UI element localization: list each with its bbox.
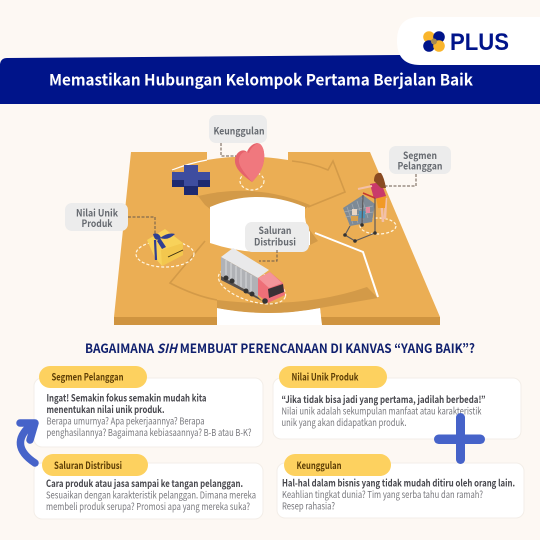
panel: Keunggulan: Resep rahasia? [282, 498, 335, 512]
canvas board [114, 152, 440, 325]
label: Nilai Unik Produk: Nilai Unik [76, 206, 118, 220]
label: Keunggulan: Keunggulan [214, 124, 264, 138]
icon: heart [235, 143, 264, 190]
arrow outlines [172, 161, 345, 207]
panel: Segmen Pelanggan: Ingat! Semakin fokus semakin mudah kita [46, 390, 206, 404]
panel: Segmen Pelanggan [34, 366, 263, 447]
panel: Nilai Unik Produk: “Jika tidak bisa jadi yang pertama, jadilah berbeda!” [282, 392, 486, 406]
panel: Segmen Pelanggan: Segmen Pelanggan [52, 370, 124, 384]
panel: Segmen Pelanggan: penghasilannya? Bagaimana kebiasaannya? B-B atau B-K? [46, 425, 252, 439]
icon: blue plus [434, 413, 485, 464]
panel: Saluran Distribusi: Sesuaikan dengan karakteristik pelanggan. Dimana mereka [46, 488, 256, 502]
panel: Nilai Unik Produk: Nilai unik adalah sekumpulan manfaat atau karakteristik [282, 404, 482, 418]
label: Nilai Unik Produk [65, 203, 155, 235]
panel: Keunggulan: Keunggulan [296, 458, 342, 472]
label: Saluran Distribusi: Saluran [258, 223, 292, 237]
centre cut-out [210, 197, 310, 252]
arc shadows [198, 191, 310, 209]
panel: Saluran Distribusi [34, 454, 263, 519]
panel: Nilai Unik Produk [273, 366, 521, 439]
label: Keunggulan [209, 115, 267, 156]
section heading: BAGAIMANA SIH MEMBUAT PERENCANAAN DI KANVAS “YANG BAIK”? [85, 338, 475, 357]
label: Saluran Distribusi: Distribusi [254, 234, 296, 248]
label: Segmen Pelanggan: Segmen [403, 148, 437, 162]
label: Segmen Pelanggan [384, 146, 451, 186]
panel: Nilai Unik Produk: Nilai Unik Produk [292, 370, 359, 384]
panel: Saluran Distribusi: membeli produk serupa? Promosi apa yang mereka suka? [46, 499, 250, 513]
label: Nilai Unik Produk: Produk [82, 216, 113, 230]
icon: gift box [136, 229, 194, 267]
icon: blue cross [172, 165, 210, 195]
white seam [315, 233, 378, 297]
panel: Segmen Pelanggan: menentukan nilai unik produk. [46, 402, 164, 416]
panel: Nilai Unik Produk: unik yang akan didapatkan produk. [282, 415, 406, 429]
logo: PLUS [397, 17, 540, 65]
label: Segmen Pelanggan: Pelanggan [398, 158, 442, 172]
arrow: curved blue [20, 423, 35, 463]
icon: truck [214, 248, 290, 311]
label: Saluran Distribusi [245, 222, 309, 261]
panel: Keunggulan: Keahlian tingkat dunia? Tim yang serba tahu dan ramah? [282, 487, 483, 501]
panel: Segmen Pelanggan: Berapa umurnya? Apa pekerjaannya? Berapa [46, 414, 204, 428]
panel: Saluran Distribusi: Saluran Distribusi [54, 458, 122, 472]
icon: shopper with cart [343, 173, 396, 243]
panel: Saluran Distribusi: Cara produk atau jasa sampai ke tangan pelanggan. [46, 476, 243, 490]
logo: PLUS: PLUS [450, 29, 509, 56]
header banner [0, 55, 540, 104]
title: Memastikan Hubungan Kelompok Pertama Berjalan Baik [49, 68, 474, 90]
panel: Keunggulan [277, 454, 524, 518]
